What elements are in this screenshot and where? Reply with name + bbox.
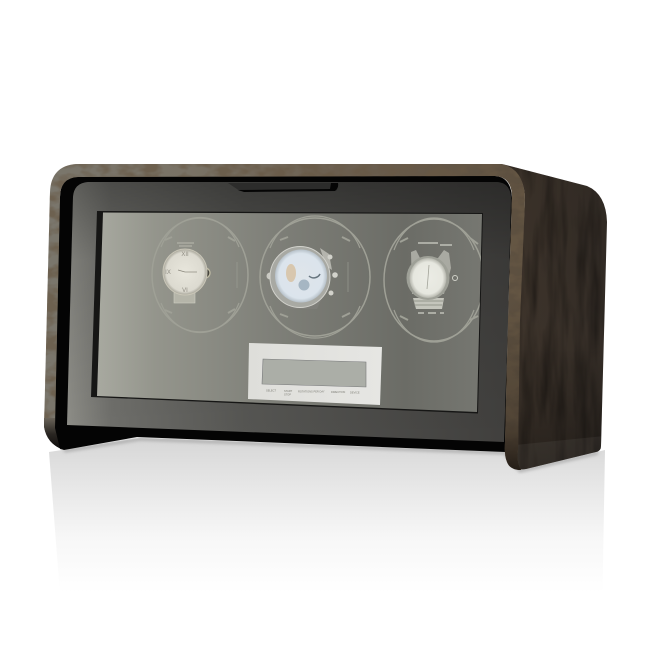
black front frame xyxy=(44,176,512,452)
brushed metal plate xyxy=(248,343,382,405)
watch: right xyxy=(406,243,458,313)
button labels: SELECT xyxy=(266,388,277,392)
contact shadow xyxy=(64,439,598,471)
watch: left: IX xyxy=(165,270,171,276)
inner grey panel xyxy=(67,182,511,442)
watch: left: XII xyxy=(181,252,189,258)
glass window xyxy=(97,212,482,412)
top notch handle xyxy=(228,183,338,192)
middle cradle xyxy=(260,216,370,338)
window black border xyxy=(91,211,483,414)
watch: middle xyxy=(266,246,338,309)
left cradle xyxy=(152,217,248,333)
button labels: START xyxy=(284,389,293,393)
watch: left xyxy=(163,243,210,303)
winder cradle rings xyxy=(152,216,484,342)
wood band around the front xyxy=(44,160,530,472)
control panel xyxy=(248,343,382,405)
button labels: DIRECTION xyxy=(331,390,345,394)
right cradle xyxy=(384,218,484,342)
watch: left: VI xyxy=(182,288,188,294)
product illustration: three-watch winder box xyxy=(44,164,607,538)
button labels: STOP xyxy=(284,392,291,396)
right side of the case xyxy=(502,160,610,474)
floor reflection xyxy=(49,438,605,620)
LCD display xyxy=(262,359,366,387)
button labels: ROTATIONS PER DAY xyxy=(298,390,325,394)
button labels xyxy=(266,388,360,396)
button labels: DEVICE xyxy=(350,390,360,394)
left foot of the case xyxy=(44,418,64,450)
